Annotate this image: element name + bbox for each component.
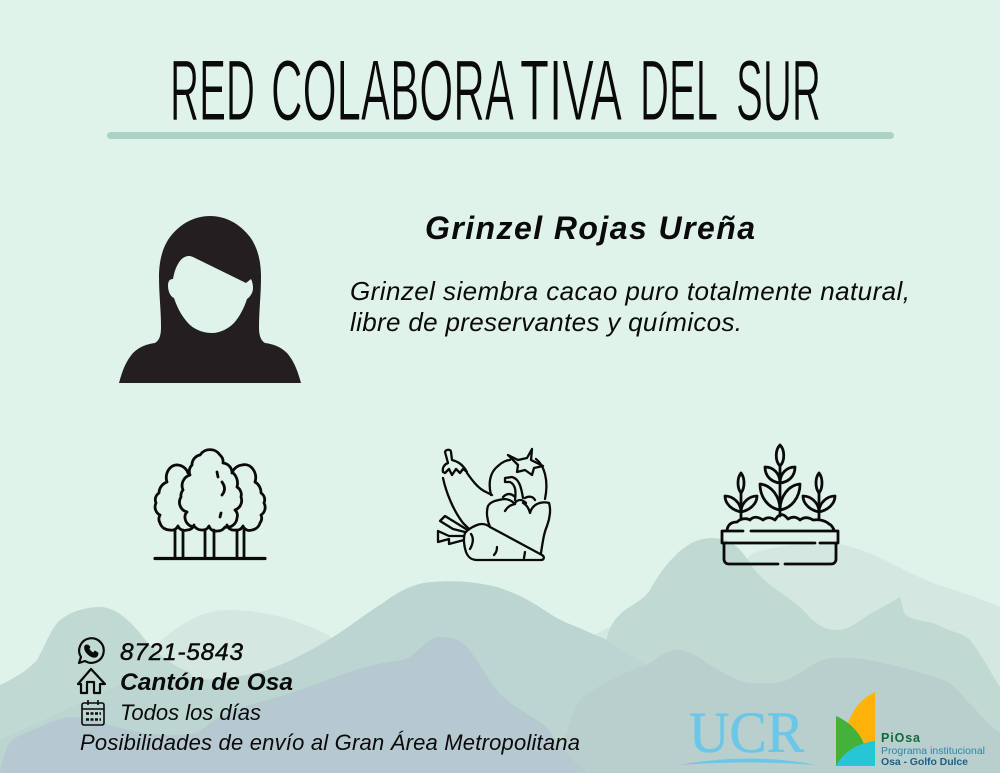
schedule row: Todos los días xyxy=(120,700,261,725)
icon: trees xyxy=(155,450,265,558)
title: TIVA xyxy=(520,43,622,139)
description: libre de preservantes y químicos. xyxy=(350,307,742,337)
logo: PiOsa: Osa - Golfo Dulce xyxy=(881,756,968,768)
title: COLABORA xyxy=(271,43,514,139)
phone row: 8721-5843 xyxy=(120,639,243,666)
shipping note: Posibilidades de envío al Gran Área Metropolitana xyxy=(80,730,580,755)
name heading: Grinzel Rojas Ureña xyxy=(425,210,755,246)
logo: UCR: UCR xyxy=(689,700,804,765)
icon: woman silhouette xyxy=(119,216,301,383)
description xyxy=(350,276,910,337)
logo: PiOsa: PiOsa xyxy=(881,731,921,745)
logo: PiOsa: Programa institucional xyxy=(881,745,985,757)
title: RED xyxy=(170,43,255,139)
text: SUR xyxy=(736,43,821,139)
icon: vegetables xyxy=(438,449,550,560)
icon: planter with seedlings xyxy=(722,445,838,564)
description: Grinzel siembra cacao puro totalmente natural, xyxy=(350,276,910,306)
title: DEL xyxy=(640,43,718,139)
icon: calendar xyxy=(82,700,104,725)
icon: house xyxy=(78,669,105,693)
background: mountains xyxy=(0,538,1000,773)
location row: Cantón de Osa xyxy=(120,669,293,696)
logo: PiOsa xyxy=(836,692,985,768)
title underline xyxy=(107,132,894,139)
icon: whatsapp xyxy=(79,638,104,663)
